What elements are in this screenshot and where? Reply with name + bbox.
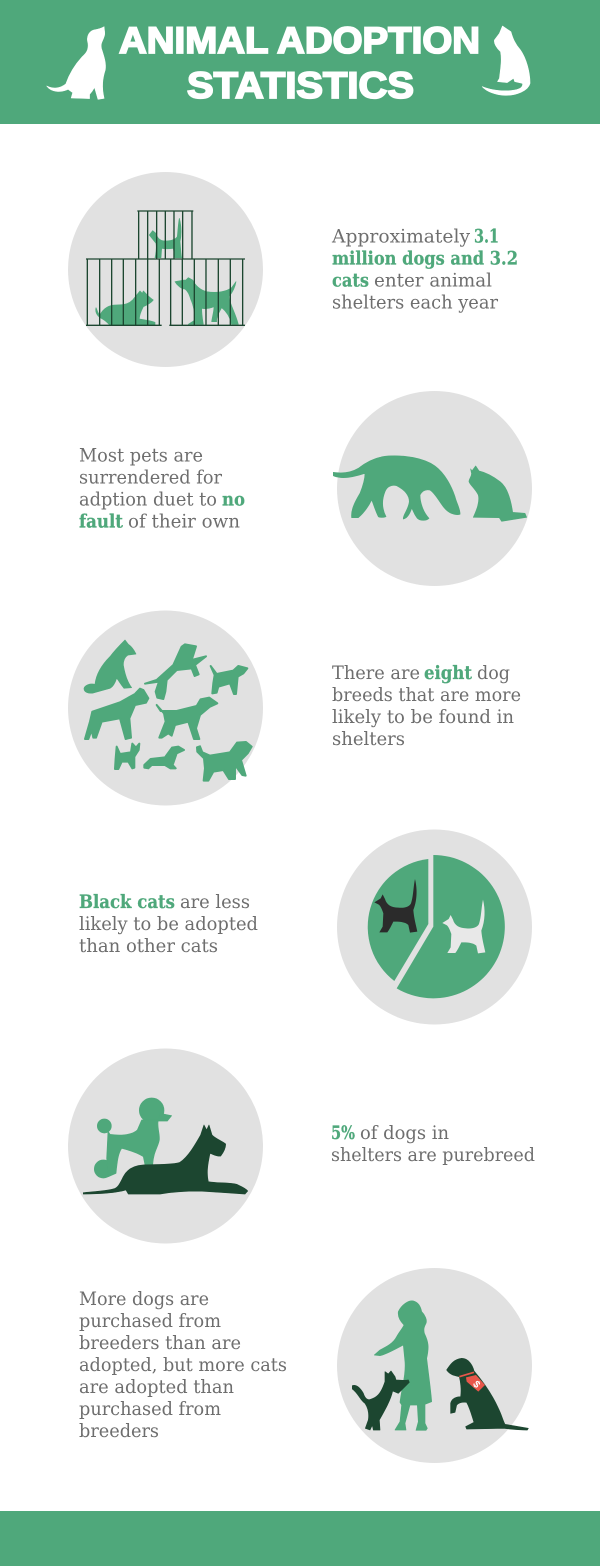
panel: purebreeds (68, 1048, 535, 1244)
pie slice: black cats (368, 859, 428, 981)
text: intake statistic (331, 226, 518, 314)
grey circle (68, 610, 263, 806)
text: breeds statistic: likely to be found in (332, 707, 514, 728)
header panel (0, 0, 600, 124)
title: STATISTICS (187, 65, 414, 106)
title: ANIMAL ADOPTION (119, 20, 480, 61)
grey circle (337, 391, 532, 586)
text: breeds statistic: eight (424, 663, 472, 684)
text: breeds statistic: dog (477, 663, 510, 684)
panel: shelter intake (68, 172, 518, 367)
icon: black cat (374, 879, 417, 933)
panel: dog breeds (68, 610, 521, 806)
text: black cats statistic: likely to be adopted (79, 914, 258, 935)
text: purebreed statistic: shelters are purebreed (331, 1145, 535, 1166)
text: breeders statistic: breeders (79, 1421, 159, 1442)
icon: price tag (459, 1372, 485, 1392)
illustration: poodle standing on great dane (83, 1098, 248, 1194)
text: intake statistic: cats (332, 270, 369, 292)
text: intake statistic: million dogs and 3.2 (332, 248, 518, 270)
panel: surrender reasons (79, 391, 532, 586)
text: breeds statistic: There are (332, 663, 420, 684)
title (119, 20, 480, 106)
grey circle (68, 172, 263, 367)
text: surrender statistic: adption duet to (79, 490, 217, 510)
text: surrender statistic (79, 446, 245, 532)
icon: great dane (83, 1125, 248, 1194)
illustration: dog sniffing and cat sitting (333, 456, 527, 521)
panel: black cats (79, 830, 532, 1024)
illustration: caged dogs and cat (86, 211, 245, 325)
text: surrender statistic: fault (79, 512, 123, 532)
illustration: woman with cat and dog (352, 1301, 528, 1430)
text: breeds statistic (332, 663, 521, 750)
text: intake statistic: enter animal (374, 270, 492, 292)
grey circle (337, 1268, 532, 1463)
text: breeders statistic: breeders than are (79, 1333, 241, 1354)
text: breeds statistic: breeds that are more (332, 685, 521, 706)
illustration: eight dog breeds (84, 640, 252, 781)
panel: breeders versus adoption (79, 1268, 532, 1463)
text: black cats statistic: are less (180, 892, 250, 913)
text: purebreed statistic (331, 1123, 535, 1166)
text: breeders statistic: purchased from (79, 1399, 221, 1420)
text: black cats statistic: Black cats (79, 892, 175, 913)
icon: woman (374, 1301, 432, 1430)
text: intake statistic: shelters each year (332, 292, 498, 314)
grey circle (337, 830, 532, 1024)
text: breeders statistic: purchased from (79, 1311, 221, 1332)
text: black cats statistic (79, 892, 258, 957)
text: breeders statistic: adopted, but more cats (79, 1355, 287, 1376)
text: breeders statistic: More dogs are (79, 1289, 209, 1310)
pie chart with black and white cats (368, 855, 505, 998)
text: surrender statistic: no (222, 490, 245, 510)
text: breeds statistic: shelters (332, 729, 405, 750)
text: intake statistic: 3.1 (474, 226, 499, 248)
text: purebreed statistic: of dogs in (360, 1123, 449, 1144)
text: surrender statistic: of their own (128, 512, 240, 532)
footer band (0, 1511, 600, 1566)
text: surrender statistic: Most pets are (79, 446, 203, 466)
text: breeders statistic (79, 1289, 287, 1442)
icon: cat (352, 1371, 409, 1430)
text: black cats statistic: than other cats (79, 936, 218, 957)
text: purebreed statistic: 5% (331, 1123, 355, 1144)
icon: white sitting cat (482, 26, 530, 95)
icon: white sitting dog (47, 27, 106, 99)
text: breeders statistic: are adopted than (79, 1377, 234, 1398)
text: surrender statistic: surrendered for (79, 468, 222, 488)
icon: poodle (94, 1098, 172, 1178)
text: intake statistic: Approximately (331, 226, 471, 248)
icon: white cat (442, 900, 485, 953)
icon: dog (447, 1358, 528, 1430)
pie slice: other cats (397, 855, 505, 998)
grey circle (68, 1048, 263, 1244)
icon: price tag: $ (470, 1379, 482, 1391)
